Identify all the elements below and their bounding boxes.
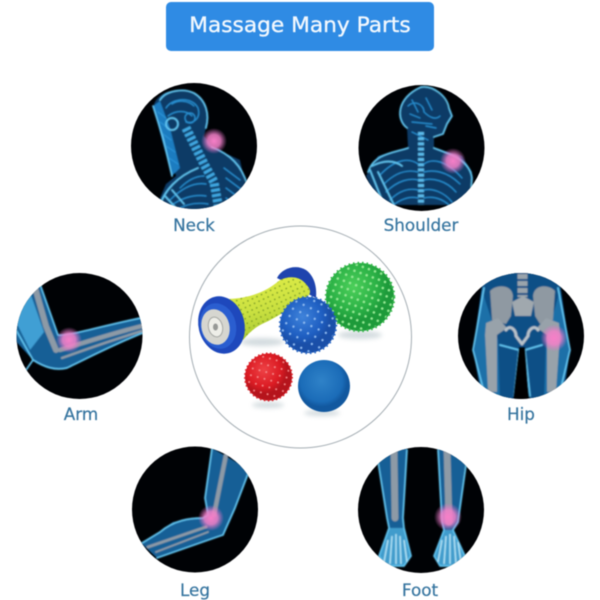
red spiky ball bbox=[245, 354, 292, 400]
shoulder: upper body skeleton illustration bbox=[366, 87, 472, 206]
panel: shoulder bbox=[358, 85, 484, 211]
panel: neck bbox=[131, 83, 257, 215]
label: shoulder: Shoulder bbox=[384, 215, 458, 235]
label: hip: Hip bbox=[507, 404, 535, 424]
label: foot: Foot bbox=[402, 580, 439, 600]
label: neck: Neck bbox=[173, 215, 215, 235]
leg: knee illustration bbox=[142, 448, 250, 558]
blue spiky ball bbox=[280, 297, 336, 353]
pain spot bbox=[434, 503, 462, 531]
pain spot bbox=[56, 327, 82, 353]
title banner: Massage Many Parts bbox=[189, 13, 411, 38]
green spiky ball bbox=[326, 263, 394, 331]
pain spot bbox=[198, 505, 224, 531]
panel: hip bbox=[458, 270, 584, 400]
foot: ankles and feet illustration bbox=[377, 448, 467, 566]
panel: foot bbox=[358, 447, 484, 573]
foot roller bbox=[192, 267, 316, 359]
pain spot bbox=[540, 324, 568, 352]
title banner bbox=[166, 2, 434, 51]
pain spot bbox=[440, 148, 466, 174]
blue smooth ball bbox=[298, 360, 350, 412]
panel: center products circle bbox=[190, 226, 412, 448]
shadows bbox=[240, 331, 382, 416]
neck: skull and spine illustration bbox=[153, 90, 250, 215]
panel: arm bbox=[10, 273, 145, 399]
hip: pelvis illustration bbox=[473, 270, 570, 400]
label: arm: Arm bbox=[64, 404, 98, 424]
label: leg: Leg bbox=[180, 580, 210, 600]
pain spot bbox=[201, 128, 227, 154]
panel: leg bbox=[132, 446, 258, 572]
arm: elbow illustration bbox=[10, 284, 145, 370]
